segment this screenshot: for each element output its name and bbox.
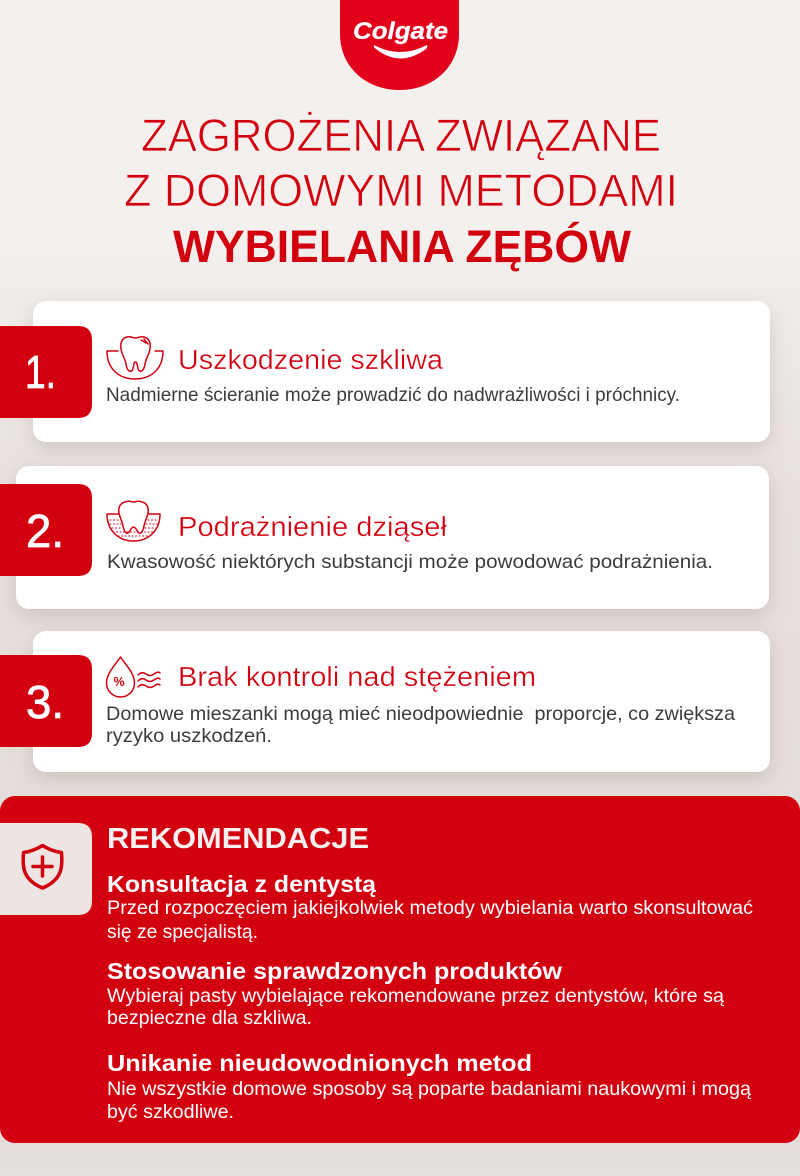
recommendation 1: Przed rozpoczęciem jakiejkolwiek metody wybielania warto skonsultować (107, 897, 753, 919)
recommendation 3 (107, 1050, 751, 1123)
title: ZAGROŻENIA ZWIĄZANE (141, 110, 661, 161)
recommendation 1 (107, 871, 753, 943)
text: Nadmierne ścieranie może prowadzić do nadwrażliwości i próchnicy. (106, 384, 680, 406)
heading: Brak kontroli nad stężeniem (178, 661, 536, 692)
heading: Uszkodzenie szkliwa (178, 344, 444, 375)
icon: percent drop and waves: % (114, 675, 125, 689)
panel: card 3 (0, 631, 770, 772)
number badge 2: 2. (26, 505, 64, 557)
recommendation 2: bezpieczne dla szkliwa. (107, 1007, 312, 1029)
heading: REKOMENDACJE (107, 823, 369, 855)
recommendation 2: Wybieraj pasty wybielające rekomendowane przez dentystów, które są (107, 985, 724, 1007)
recommendation 2 (107, 958, 724, 1029)
recommendation 2: Stosowanie sprawdzonych produktów (107, 958, 563, 984)
panel: recommendations (0, 796, 800, 1143)
number badge 2 (0, 484, 92, 576)
text: Kwasowość niektórych substancji może powodować podrażnienia. (107, 551, 713, 573)
recommendation 1: Konsultacja z dentystą (107, 871, 377, 897)
icon: tooth with irritated gums (107, 501, 160, 541)
title: WYBIELANIA ZĘBÓW (173, 221, 632, 272)
number badge 1 (0, 326, 92, 418)
logo: Colgate badge (340, 0, 459, 90)
recommendation 3: Unikanie nieudowodnionych metod (107, 1050, 532, 1076)
icon: percent drop and waves (106, 657, 160, 697)
number badge 3: 3. (26, 676, 64, 728)
panel: card 2 (0, 466, 769, 609)
recommendation 3: być szkodliwe. (107, 1101, 234, 1123)
recommendation 3: Nie wszystkie domowe sposoby są poparte badaniami naukowymi i mogą (107, 1078, 751, 1100)
panel: card 1 (0, 301, 770, 442)
number badge 1: 1. (25, 346, 56, 398)
logo: Colgate badge: Colgate (353, 18, 448, 45)
title: Z DOMOWYMI METODAMI (124, 165, 678, 216)
icon tile: shield with cross (0, 823, 92, 915)
recommendation 1: się ze specjalistą. (107, 921, 258, 943)
title (124, 110, 678, 272)
text: Domowe mieszanki mogą mieć nieodpowiednie proporcje, co zwiększa (106, 703, 735, 725)
heading: Podrażnienie dziąseł (178, 511, 447, 542)
icon: damaged tooth (107, 337, 163, 379)
number badge 3 (0, 655, 92, 747)
text (106, 703, 735, 747)
text: ryzyko uszkodzeń. (106, 725, 272, 747)
